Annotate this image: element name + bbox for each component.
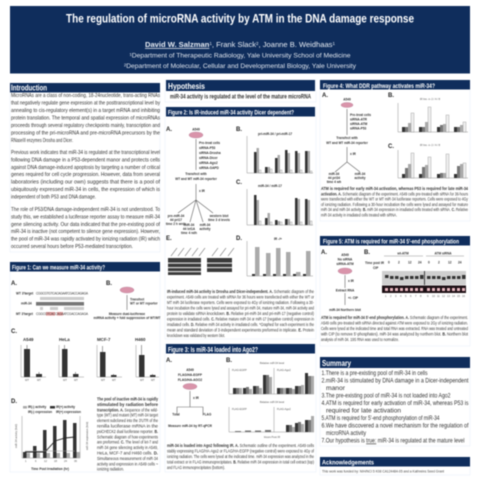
northern blot: CIP (373, 266, 379, 270)
heading: summary: Summary (322, 358, 351, 368)
label A: A. (322, 93, 328, 99)
bar chart: MCF-7 (97, 337, 122, 382)
bar chart: miR-34 activity: IR -/+ (274, 237, 282, 241)
summary list (322, 370, 469, 444)
schematic: DDR siRNA experiment: Transfect with (336, 136, 358, 140)
text: figure 1 caption: type (WT) and mutant (MT) miR-34 target (97, 413, 159, 418)
schematic: DDR siRNA experiment: siRNA-ATM (350, 122, 368, 126)
sequence alignment: MT 3'target (16, 312, 34, 316)
schematic: siRNA experiment: 44 let1A (183, 227, 196, 231)
schematic: DDR siRNA experiment: A549 (343, 98, 351, 102)
schematic: siRNA experiment: western blot (209, 214, 229, 218)
text: intro paragraph 2: Previous work indicates that miR-34 is regulated at the transcriptional level (11, 150, 160, 156)
text: intro paragraph 2: laboratories (including our own) suggests that there is a pool of (11, 180, 160, 186)
combo chart: activity and expression: 18 (54, 459, 57, 463)
northern blot: 11 (437, 294, 440, 298)
bar chart: FLAG immunoprecipitates: Hours Post IR (264, 435, 280, 439)
bar chart: H460: WT (140, 378, 144, 382)
schematic: experiment flow: miRNA activity + fold suppression of WT/MT (94, 316, 161, 320)
sequence alignment: miR-34 (21, 302, 32, 306)
schematic: siRNA experiment: miR-34 (200, 223, 211, 227)
summary list: 1.There is a pre-existing pool of miR-34 in cells (322, 370, 428, 377)
schematic: northern experiment: A549 (341, 253, 349, 257)
schematic: northern experiment: x IR (348, 279, 355, 283)
schematic: experiment flow: Measure dual-luciferase (109, 312, 145, 316)
panel: figure 4 (320, 80, 470, 221)
text: figure 1 caption: HeLa, MCF-7 and H460 cells. D. (97, 450, 158, 456)
schematic: DDR siRNA experiment: x IR (350, 152, 357, 156)
title: The regulation of microRNA activity by ATM in the DNA damage response (66, 14, 414, 26)
label A: A. (166, 127, 172, 133)
text: intro paragraph 3 (11, 207, 160, 250)
affiliation 1: ¹Department of Therapeutic Radiology, Yale University School of Medicine (130, 52, 351, 60)
bar chart: MCF-7: MCF-7 (97, 337, 111, 342)
label C: C. (388, 144, 394, 150)
panel: introduction (10, 83, 160, 252)
schematic: northern experiment: No siRNA (338, 258, 353, 262)
schematic: experiment flow: Transfect (130, 298, 145, 302)
schematic: siRNA experiment: x IR (199, 189, 206, 193)
text: intro paragraph 2: ubiquitously expressed miR-34 in cells, the expression of which is (11, 187, 160, 193)
schematic: DDR siRNA experiment: activity (354, 176, 366, 180)
schematic: siRNA experiment: siRNA-P53 (199, 146, 216, 150)
text: figure 2 caption (167, 289, 314, 338)
label C: C. (11, 329, 17, 335)
authors: , Joanne B. Weidhaas (259, 40, 333, 49)
text: figure 1 caption: transcription. A. Sequence of the wild- (97, 407, 158, 412)
bar chart: miR-34 activity (398, 143, 468, 178)
label A: A. (166, 358, 172, 364)
panel: figure 5 (320, 236, 470, 346)
bar chart: A549: WT (25, 378, 29, 382)
bar chart: total extract: FLAG-Ago2 (277, 368, 291, 372)
bar chart: HeLa: HeLa (59, 337, 70, 342)
acknowledgement text: This work was funded by: NIH/NCI 5 K08 CA124484-05 and a Kathreins Seed Grant (322, 468, 445, 474)
bar chart: miR-34 activity (247, 237, 313, 276)
text: figure 1 caption: psiCHECK2 dual luciferase reporter. B. (97, 429, 158, 434)
text: intro paragraph 1: annealing to cis-regulatory element(s) in a target mRNA and inhibiting (11, 108, 160, 114)
bar chart: MCF-7: MT (112, 378, 116, 382)
authors: 2 (256, 41, 259, 46)
northern blot: Time post IR (365, 261, 385, 265)
bar chart: miR-34 expression: IR hrs -/+ 2 / 4 / 8 (420, 97, 441, 101)
summary list: required for late activation (326, 408, 401, 414)
northern blot: 2 (438, 260, 440, 264)
northern blot: ATM siRNA (434, 252, 452, 256)
northern blot: 12 (442, 294, 445, 298)
text: figure 1 caption: renilla luciferase mRNA in the (97, 424, 159, 428)
bar chart: MCF-7: WT (101, 378, 105, 382)
schematic: Ago2 experiment: x IR (193, 396, 200, 400)
schematic: DDR siRNA experiment: time 4 wh (327, 180, 341, 184)
text: figure 4 caption (321, 186, 469, 218)
schematic: experiment flow (94, 287, 161, 320)
text: intro paragraph 3: gene silencing activity. Our data indicated that the pre-existing pool of (11, 222, 160, 228)
sequence alignment: CGGCGTGTCACAGAATCGACCAGAGA (36, 292, 89, 296)
combo chart: activity and expression: IR(-) activity (28, 405, 46, 409)
schematic: Ago2 experiment: Measure miR-34 by RT-qPCR (168, 424, 213, 428)
text: intro paragraph 1: MicroRNAs are a class of non-coding, 18-24nucleotide, trans-acting RNAs (11, 93, 160, 99)
text: figure 1 caption: are preformed. C. The level of let-7 and (97, 440, 158, 445)
schematic: siRNA experiment: pre-miR-34 (168, 214, 185, 218)
label B: B. (106, 281, 112, 287)
schematic: northern experiment (329, 253, 362, 312)
text: figure 5 caption (321, 315, 469, 342)
text: figure 2 caption: hour incubation the cells were lysed and assayed for pri-miR-34, mature miR-34, miR-34 activity and (167, 306, 314, 310)
text: intro paragraph 2 (11, 150, 160, 200)
combo chart: activity and expression: 36 (74, 459, 77, 463)
bar chart: FLAG immunoprecipitates (229, 400, 314, 439)
heading: introduction: Introduction (11, 84, 47, 92)
label C: C. (236, 180, 242, 186)
schematic: siRNA experiment: siRNA-GAPD (199, 166, 220, 170)
northern blot: 6 (410, 294, 412, 298)
northern blot: 2 (398, 260, 400, 264)
combo chart: activity and expression: 6 (35, 459, 37, 463)
schematic: siRNA experiment: miR-34 (184, 223, 195, 227)
text: intro paragraph 2: genes required for cell cycle progression. However, data from several (11, 172, 160, 178)
text: figure 1 caption: ionizing radiation. (97, 467, 124, 472)
schematic: siRNA experiment: time 4 ndh (181, 231, 197, 235)
label B: B. (236, 127, 242, 133)
text: figure 2 caption: irradiated cells. D. Relative miR-34 activity in irradiated cells. *Graphed for each experiment is the (167, 322, 314, 327)
schematic: Ago2 experiment: Total (172, 412, 180, 416)
northern blot (365, 252, 466, 298)
label E: E. (166, 236, 172, 242)
western blots (168, 248, 234, 275)
schematic: DDR siRNA experiment: 44 pri34 (328, 176, 340, 180)
schematic: experiment flow: WT or MT reporter (130, 302, 158, 306)
schematic: DDR siRNA experiment: miR-34 (355, 172, 366, 176)
schematic: siRNA experiment: Pre-treat cells (199, 141, 220, 145)
bar chart: miR-34 expression (398, 97, 468, 132)
label B: B. (388, 93, 394, 99)
hypothesis statement: miR-34 activity is regulated at the level of the mature microRNA (170, 94, 312, 100)
text: intro paragraph 3: The role of P53/DNA damage-independent miR-34 is not understood. To (11, 207, 160, 213)
text: figure 1 caption: The pool of inactive miR-34 is rapidly (97, 396, 158, 402)
bar chart: HeLa: MT (74, 378, 78, 382)
schematic: DDR siRNA experiment: siRNA-P53 (350, 126, 367, 130)
text: figure 1 caption: element subcloned into the 3'UTR of the (97, 418, 158, 423)
schematic: DDR siRNA experiment: miR-34 (329, 172, 340, 176)
schematic: Ago2 experiment: FLAG/HA-AGO2 (178, 378, 202, 382)
text: figure 1 caption: activity and expression in A549 cells ~ (97, 461, 158, 466)
bar chart: pri-miR-34 (247, 132, 313, 173)
schematic: siRNA experiment: 44 pri17 (170, 218, 182, 222)
text: figure 5 caption: with CIP (to remove 5'-phosphates). miR-34 was analyzed by northern blot. B. Northern blot (321, 332, 469, 336)
text: intro paragraph 2: independent of both P53 and DNA damage. (11, 194, 96, 200)
text: figure 4 caption: miR-34 activity in irradiated cells treated with siRNA. (321, 212, 397, 218)
bar chart: mature miR-34 (247, 184, 313, 225)
northern blot: 13 (447, 294, 450, 298)
text: figure 1 caption (97, 396, 159, 472)
authors: 1 (332, 41, 335, 46)
text: intro paragraph 1: protein translation. The temporal and spatial expression of microRNAs (11, 116, 160, 122)
text: figure 3 caption: and FLAG immunoprecipitates (bottom). (167, 465, 225, 470)
bar chart: total extract (229, 361, 314, 394)
heading: figure 4: Figure 4: What DDR pathway activates miR-34? (323, 83, 435, 90)
combo chart: activity and expression: IR(+) activity (56, 405, 75, 409)
label A: A. (11, 281, 17, 287)
text: intro paragraph 1: RNaseIII enzymes Drosha and Dicer. (11, 138, 73, 144)
bar chart: total extract: FLAG-EGFP (232, 368, 247, 372)
heading: figure 3: Figure 3: Is miR-34 loaded into Ago2? (168, 347, 258, 354)
northern blot: 15 (457, 294, 460, 298)
panel: hypothesis (165, 80, 316, 102)
summary list: 5.ATM is required for 5'-end phosphorylation of miR-34 (322, 415, 440, 422)
northern blot: 9 (427, 294, 429, 298)
bar chart: mature miR-34: miR-34 / miR-17 (258, 184, 282, 188)
authors: David W. Salzman (145, 40, 210, 49)
schematic: DDR siRNA experiment: WT and MT miR-34 reporter (326, 141, 369, 145)
schematic: northern experiment: miR-34 Northern blot (329, 308, 362, 312)
text: intro paragraph 1: proceeds through several regulatory checkpoints mainly, transcription and (11, 123, 160, 129)
schematic: siRNA experiment (166, 128, 230, 235)
text: intro paragraph 2: following DNA damage in a P53-dependent manor and protects cells (11, 157, 160, 163)
northern blot: 24 (418, 260, 422, 264)
text: figure 2 caption: IR-induced miR-34 activity is Drosha and Dicer-independent. A. Schematic diagram of the (167, 289, 314, 294)
text: figure 2 caption: MT miR-34 luciferase reporters. Cells were exposed to 4Gy of ionizing radiation. Following a 30- (167, 300, 314, 305)
text: figure 1 caption: Schematic diagram of how experiments (97, 434, 159, 439)
northern blot: 3 (395, 294, 397, 298)
text: figure 2 caption: knockdown was validated by western blot. (167, 333, 225, 338)
northern blot: 4 (400, 294, 402, 298)
label D: D. (11, 399, 17, 405)
combo chart: activity and expression: 24 (64, 459, 67, 463)
bar chart: FLAG immunoprecipitates: FLAG-EGFP (232, 407, 247, 411)
schematic: DDR siRNA experiment: Pre-treat cells (350, 113, 371, 117)
text: figure 2 caption: experiment. A549 cells are treated with siRNA for 36 hours were transfected with either the WT or (167, 294, 314, 300)
northern blot: 8 (420, 294, 422, 298)
combo chart: activity and expression: IR(+) expression (56, 410, 81, 414)
schematic: Ago2 experiment (168, 368, 213, 428)
text: figure 2 caption: mean and standard deviation of 3-independent experiments preformed in triplicate. E. Protein (167, 328, 314, 332)
bar chart: miR-34 activity: IR hrs -/+ 2 / 4 / 8 (420, 143, 441, 147)
text: intro paragraph 3: occurred several hours before P53-mediated transcription. (11, 244, 133, 250)
northern blot: 10 (432, 294, 435, 298)
schematic: Ago2 experiment: FLAG/HA-EGFP (178, 373, 203, 377)
combo chart: activity and expression: 12 (44, 459, 47, 463)
affiliation 2: ²Department of Molecular, Cellular and Developmental Biology, Yale University (124, 63, 357, 70)
summary list: manor (326, 385, 346, 392)
northern blot: 24 (458, 260, 462, 264)
schematic: northern experiment: siRNA-ATM (336, 262, 354, 266)
header banner (10, 6, 470, 74)
label D: D. (236, 236, 242, 242)
text: intro paragraph 1: processing of the pri-microRNA and pre-microRNA precursors by the (11, 130, 160, 136)
sequence alignment: WT 3'target (16, 292, 34, 296)
summary list: microRNA activity (326, 430, 367, 437)
text: intro paragraph 2: against DNA damage-induced apoptosis by targeting a number of critical (11, 165, 160, 171)
heading: figure 2: Figure 2: Is IR-induced miR-34 activity Dicer dependent? (168, 110, 294, 116)
text: intro paragraph 1 (11, 93, 160, 144)
label A: A. (321, 250, 327, 256)
schematic: siRNA experiment: time 3 d levels (208, 218, 230, 222)
northern blot: 14 (452, 294, 455, 298)
text: figure 3 caption: miR-34 is loaded into Ago2 following IR. A. Schematic outline of the experiment. A549 cells (167, 443, 315, 448)
text: intro paragraph 1: that negatively regulate gene expression at the posttranscriptional level by (11, 100, 160, 106)
text: figure 3 caption: ionizing radiation. The cells were lysed at the indicated time. miR-34 expression was analyzed in the (167, 454, 314, 459)
bar chart: A549: A549 (23, 337, 34, 342)
summary list: 3.The pre-existing pool of miR-34 is not loaded into Ago2 (322, 392, 451, 400)
bar chart: total extract: Relative miR-34 level (260, 361, 285, 365)
combo chart: activity and expression: IR(-) expression (28, 410, 52, 414)
combo chart: activity and expression: 1 (25, 459, 27, 463)
sequence alignment (16, 292, 89, 316)
schematic: siRNA experiment: siRNA-Ago2 (199, 161, 218, 165)
northern blot: 12 (448, 260, 452, 264)
text: figure 3 caption: stably expressing FLAG/HA-Ago2 or FLAG/HA-EGFP (negative control) were exposed to 4Gy of (167, 448, 315, 454)
bar chart: HeLa (59, 337, 84, 382)
sequence alignment: CGGCGTCACCAGAATCGACCAGAGA (36, 312, 89, 316)
combo chart: activity and expression (14, 405, 89, 471)
text: intro paragraph 3: the pool of miR-34 was rapidly activated by ionizing radiation (IR) which (11, 237, 160, 243)
northern blot: 2 (390, 294, 392, 298)
text: figure 1 caption: miR-34 gene silencing activity in A549, (97, 445, 158, 450)
schematic: siRNA experiment: A549 (192, 128, 200, 132)
combo chart: activity and expression: miR-34 activity (fold) (14, 424, 18, 448)
bar chart: H460 (135, 337, 159, 382)
text: figure 2 caption: protein to validate siRNA knockdown. B. Relative pri-miR-34 and pri-miR-17 (negative control) (167, 311, 314, 316)
bar chart: pri-miR-34: pri-miR-34 / pri-miR-17 (258, 132, 292, 136)
bar chart: H460: MT (151, 378, 155, 382)
panel: summary (320, 357, 470, 446)
text: figure 5 caption: analysis of miR-34. 19S RNA was used to normalize. (321, 337, 399, 342)
schematic: siRNA experiment: activity (200, 227, 211, 231)
authors: 1 (209, 41, 212, 46)
schematic: northern experiment: Extract RNA (336, 288, 355, 292)
schematic: northern experiment: +/- CIP (348, 296, 359, 300)
northern blot: 5 (405, 294, 407, 298)
bar chart: FLAG immunoprecipitates: FLAG-Ago2 (277, 407, 291, 411)
authors: , Frank Slack (212, 40, 256, 49)
combo chart: activity and expression: Time Post Irradiation (hr) (31, 467, 69, 471)
bar chart: A549 (21, 337, 46, 382)
northern blot: 0 (388, 260, 390, 264)
panel: figure 2 (165, 107, 316, 339)
text: figure 2 caption: expression in irradiated cells. C. Relative mature miR-34 or miR-17 (negative control) expression in (167, 316, 314, 322)
text: figure 3 caption: total extract or in FLAG immunoprecipitates. B. Relative miR-34 expression in total cell extract (top) (167, 460, 314, 464)
schematic: DDR siRNA experiment: siRNA-ATR (350, 118, 368, 122)
schematic: siRNA experiment: time 2 h wrds (166, 222, 186, 226)
schematic: Ago2 experiment: FLAG (203, 412, 212, 416)
bar chart: A549: MT (37, 378, 41, 382)
heading: hypothesis: Hypothesis (168, 82, 205, 91)
label B: B. (226, 358, 232, 364)
northern blot: 7 (415, 294, 417, 298)
bar chart: H460: H460 (135, 337, 146, 342)
northern blot: 16 (462, 294, 465, 298)
text: figure 3 caption (167, 443, 315, 470)
text: figure 1 caption: Simultaneous measurement of miR-34 (97, 456, 158, 461)
northern blot: 12 (408, 260, 412, 264)
heading: figure 1: Figure 1: Can we measure miR-34 activity? (12, 264, 105, 272)
schematic: siRNA experiment: siRNA-Drosha (199, 151, 221, 155)
panel: figure 1 (10, 262, 161, 472)
label B: B. (364, 250, 370, 256)
text: intro paragraph 3: miR-34 is inactive (not competent to silence gene expression). However, (11, 229, 160, 235)
panel: figure 3 (165, 344, 316, 472)
bar chart: HeLa: WT (63, 378, 67, 382)
northern blot: 1 (385, 294, 387, 298)
combo chart: activity and expression: miR-34 expression (fold) (85, 422, 89, 450)
text: figure 5 caption: ATM is required for miR-34 5'-end phosphorylation. A. Schematic diagram of the experiment. (321, 315, 468, 320)
schematic: DDR siRNA experiment (326, 98, 371, 184)
schematic: siRNA experiment: WT and MT miR-34 reporter (175, 177, 218, 181)
text: intro paragraph 3: study this, we established a luciferase reporter assay to measure miR-34 (11, 214, 160, 220)
schematic: Ago2 experiment: A549 (186, 368, 194, 372)
text: figure 4 caption: miR-34 and miR-34 activity. B. miR-34 expression in irradiated cells treated with siRNA. C. Relative (321, 207, 468, 212)
northern blot: wt-ATM (396, 252, 409, 256)
northern blot: 0 (428, 260, 430, 264)
bar chart: FLAG immunoprecipitates: Relative miR-34 level (260, 400, 285, 404)
text: figure 1 caption: stimulated by radiation before (97, 402, 159, 407)
schematic: siRNA experiment: Transfect with (185, 172, 207, 176)
heading: acknowledgements: Acknowledgements (322, 460, 374, 466)
panel: acknowledgements (320, 457, 470, 475)
schematic: siRNA experiment: siRNA-Dicer (199, 156, 218, 160)
